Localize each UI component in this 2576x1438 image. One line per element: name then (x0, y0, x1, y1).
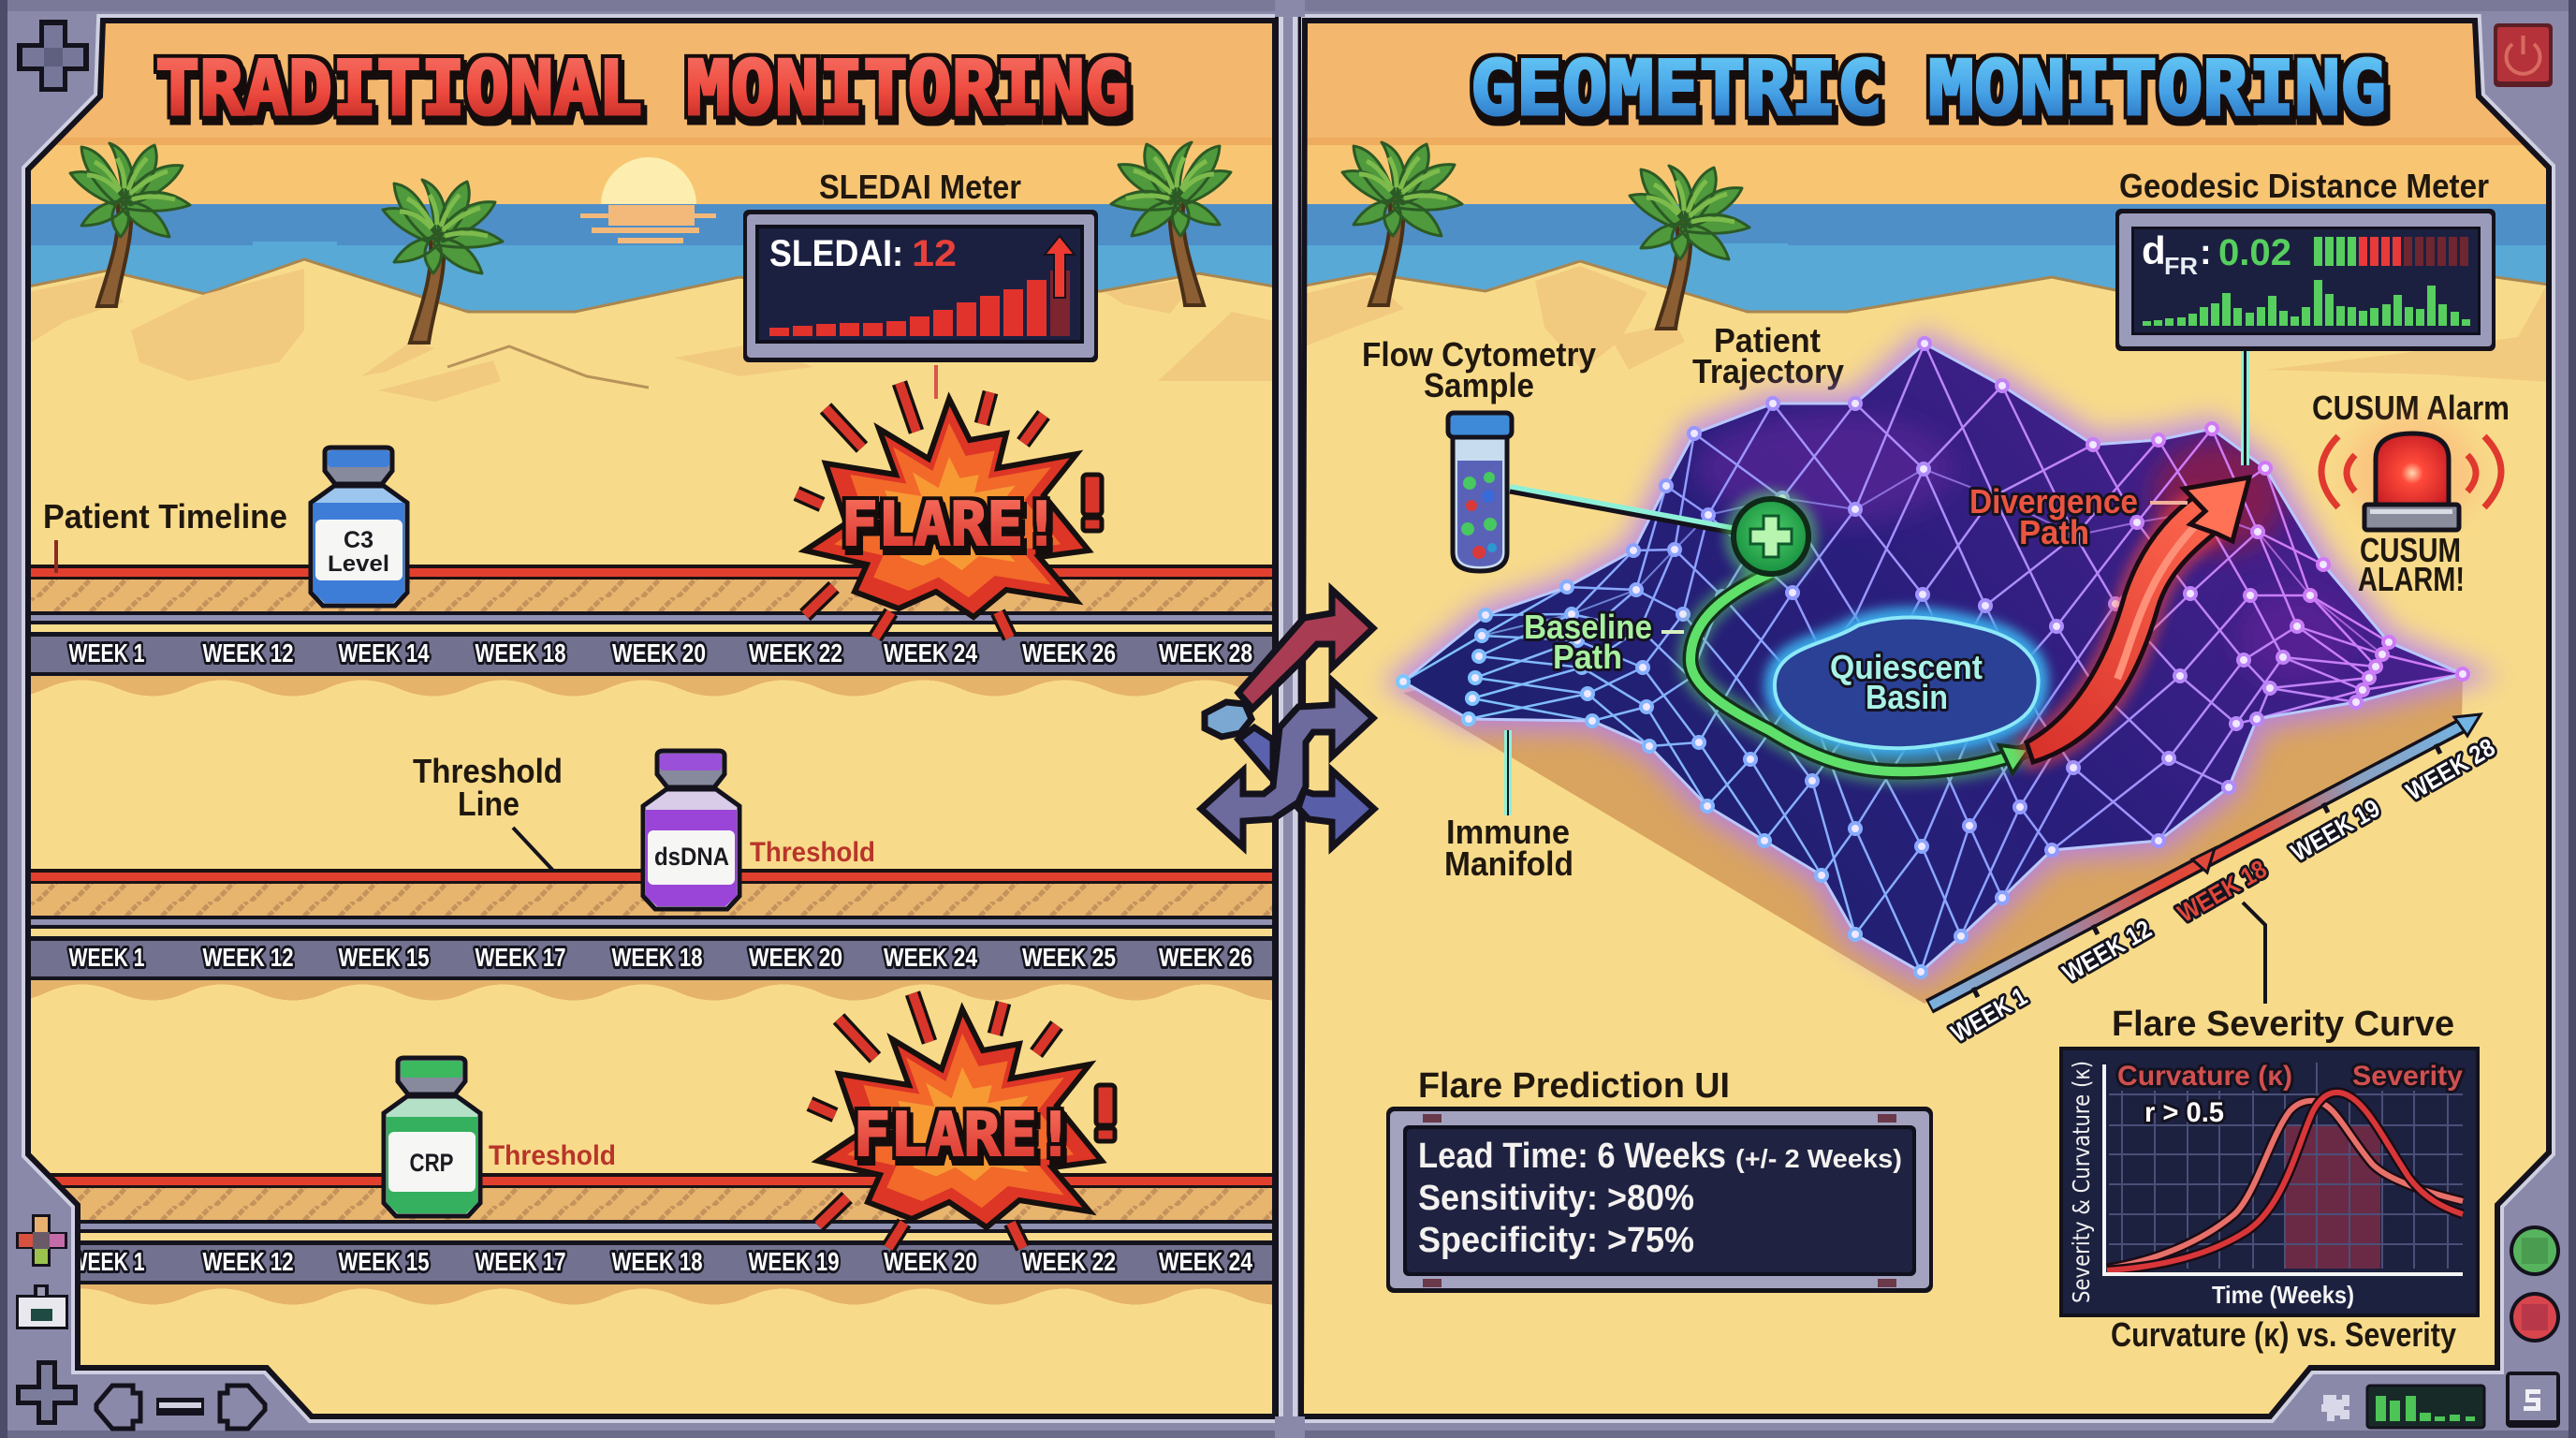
patient trajectory label: Trajectory (1692, 352, 1844, 390)
arrow cluster: crossing arrows (1201, 590, 1374, 847)
D-pad colored bottom left (16, 1214, 67, 1267)
histogram (2143, 280, 2470, 326)
label: immune manifold: Manifold (1444, 844, 1573, 883)
geodesic distance meter (2115, 209, 2496, 351)
C3 label (328, 527, 389, 577)
timeline 2 week labels: WEEK 15 (339, 943, 429, 972)
timeline 2 week labels: WEEK 12 (202, 943, 294, 972)
timeline 2 week labels: WEEK 24 (884, 943, 977, 972)
axis week labels (1946, 733, 2500, 1048)
D-pad top left (17, 20, 89, 92)
timeline 3 week labels: WEEK 19 (749, 1247, 839, 1276)
arrow: node (1205, 702, 1251, 737)
panel: traditional monitoring (0, 0, 1310, 1438)
threshold tag 3: Threshold (489, 1140, 616, 1171)
lead time: (+/- 2 Weeks) (1735, 1144, 1902, 1173)
chart legend: Curvature (κ) (2117, 1061, 2292, 1092)
axis week labels: WEEK 28 (2401, 733, 2500, 806)
timeline 1 week labels: WEEK 14 (339, 638, 430, 668)
lead time (1418, 1137, 1902, 1176)
timeline 1 week labels: WEEK 28 (1159, 638, 1252, 668)
title: geometric monitoring: GEOMETRIC MONITORING (1471, 45, 2386, 132)
power button (2494, 23, 2553, 87)
dFR value: : (2200, 233, 2212, 272)
label: baseline path: Baseline (1524, 608, 1652, 646)
label: divergence path (1969, 482, 2188, 551)
label: immune manifold (1444, 813, 1573, 883)
label: immune manifold: Immune (1446, 813, 1570, 851)
SLEDAI meter heading: SLEDAI Meter (819, 168, 1021, 206)
timeline 1 week labels: WEEK 18 (476, 638, 565, 668)
label: CUSUM alarm callout: ALARM! (2358, 560, 2465, 598)
axis week labels: WEEK 12 (2057, 915, 2157, 988)
patient trajectory label: Patient (1714, 321, 1821, 360)
axis week labels: WEEK 18 (2173, 855, 2272, 928)
SLEDAI value number: 12 (912, 233, 957, 274)
axis week labels: WEEK 1 (1946, 982, 2032, 1048)
timeline 2 week labels: WEEK 20 (749, 943, 842, 972)
time axis arrow (1929, 714, 2500, 1048)
timeline 1 week labels: WEEK 22 (749, 638, 842, 668)
patient trajectory label (1692, 321, 1844, 390)
icon: CUSUM beacon (2321, 417, 2501, 530)
threshold tag 2: Threshold (750, 837, 875, 868)
C3 label: C3 (344, 527, 373, 553)
divergence path red arrow (2027, 477, 2249, 762)
flow sample tube (1448, 413, 1732, 571)
menu box button (2506, 1372, 2560, 1428)
segment gauge (2314, 237, 2468, 266)
leader: week 18 to curve (2243, 902, 2265, 1004)
label: patient timeline: Patient Timeline (43, 497, 287, 536)
flare prediction panel (1386, 1107, 1933, 1293)
label: baseline path (1524, 608, 1684, 676)
panel: geometric monitoring background (1292, 0, 2576, 1438)
label: CUSUM alarm callout (2358, 531, 2465, 598)
manifold nodes glow (1403, 344, 2463, 972)
quiescent basin label: Basin (1866, 678, 1948, 716)
patient node green circle (1724, 490, 1818, 583)
CRP vial (384, 1058, 480, 1216)
flare prediction heading: Flare Prediction UI (1418, 1066, 1730, 1106)
timeline 3 week labels: WEEK 12 (202, 1247, 294, 1276)
dFR value: FR (2164, 252, 2198, 280)
flow cytometry label: Flow Cytometry (1362, 335, 1596, 374)
curve: curvature (2107, 1101, 2463, 1269)
timeline 2 week labels: WEEK 25 (1022, 943, 1116, 972)
timeline 2 week labels: WEEK 17 (476, 943, 565, 972)
timeline 2 week labels (66, 946, 1254, 970)
flare burst 1 (797, 383, 1102, 638)
dash button (156, 1398, 204, 1416)
label: divergence path: Divergence (1969, 482, 2138, 521)
D-pad bottom left (16, 1360, 78, 1425)
timeline 2 week labels: WEEK 18 (612, 943, 702, 972)
flow cytometry label: Sample (1424, 366, 1534, 404)
timeline 3 week labels: WEEK 17 (476, 1247, 565, 1276)
dsDNA vial (643, 751, 739, 909)
clipboard icon (16, 1284, 68, 1329)
CRP label: CRP (410, 1149, 453, 1177)
arrow: short blue segment (1238, 727, 1273, 780)
leader: meter to flare (934, 365, 938, 399)
timeline 1 week labels: WEEK 1 (69, 638, 144, 668)
lead time: Lead Time: 6 Weeks (1418, 1137, 1726, 1176)
SLEDAI meter panel (743, 210, 1098, 362)
specificity: Specificity: >75% (1418, 1221, 1694, 1260)
SLEDAI bar chart (769, 271, 1070, 336)
manifold outline (1403, 344, 2463, 972)
left hex button (96, 1386, 140, 1429)
mini signal screen (2367, 1386, 2484, 1428)
C3 label: Level (328, 551, 389, 577)
manifold node cores (1403, 344, 2463, 972)
title: traditional monitoring: TRADITIONAL MONITORING (155, 45, 1129, 132)
chart legend: Severity (2352, 1061, 2463, 1092)
chart legend (2117, 1061, 2463, 1092)
flare burst 1: FLARE! (842, 491, 1060, 560)
quiescent basin label (1830, 648, 1983, 716)
timeline 3 week labels: WEEK 24 (1159, 1247, 1252, 1276)
label: divergence path: Path (2019, 513, 2089, 551)
label: threshold line: Line (458, 785, 520, 823)
label: threshold line: Threshold (413, 752, 563, 790)
arrow: red up-right (1238, 590, 1373, 709)
SLEDAI value text: SLEDAI: (769, 233, 903, 274)
label: CUSUM alarm: CUSUM Alarm (2312, 389, 2510, 427)
arrow: S curve (1201, 681, 1373, 847)
leader: immune manifold (1504, 730, 1512, 815)
chart axes (2104, 1064, 2463, 1274)
label: threshold line (413, 752, 563, 872)
quiescent basin label: Quiescent (1830, 648, 1983, 686)
flare burst 2: FLARE! (854, 1101, 1074, 1170)
shadow under manifold (1403, 655, 2463, 1004)
dsDNA label: dsDNA (654, 843, 729, 871)
dFR value: 0.02 (2218, 232, 2291, 273)
axis week labels: WEEK 19 (2286, 794, 2385, 867)
immune manifold surface (1403, 344, 2463, 972)
label: baseline path: Path (1553, 638, 1622, 676)
baseline path green (1690, 573, 2029, 773)
C3 vial (311, 448, 407, 606)
rising arrow (1045, 236, 1075, 298)
chart: curvature vs severity (2059, 1047, 2480, 1317)
green status button (2510, 1225, 2560, 1276)
geodesic meter heading: Geodesic Distance Meter (2119, 167, 2489, 205)
correlation note: r > 0.5 (2144, 1097, 2224, 1128)
leader: tube to node (1510, 489, 1732, 533)
y axis label: Severity & Curvature (κ) (2068, 1061, 2095, 1303)
timeline 1 week labels (66, 640, 1254, 665)
flare burst 2 (810, 993, 1115, 1248)
center divider (1275, 0, 1305, 1438)
red status button (2510, 1292, 2560, 1343)
timeline 3 week labels: WEEK 22 (1022, 1247, 1116, 1276)
timeline 3 week labels (80, 1249, 1254, 1273)
flow cytometry label (1362, 335, 1596, 404)
dFR value: d (2142, 228, 2166, 272)
dFR value (2142, 228, 2291, 280)
quiescent basin (1775, 617, 2039, 748)
arrow: blue down-right (1298, 770, 1374, 847)
label: CUSUM alarm callout: CUSUM (2360, 531, 2461, 569)
timeline 2 week labels: WEEK 26 (1159, 943, 1252, 972)
label: patient timeline (43, 497, 287, 573)
right hex button (220, 1386, 265, 1429)
timeline 1 week labels: WEEK 26 (1022, 638, 1116, 668)
x axis label: Time (Weeks) (2212, 1281, 2354, 1309)
timeline 1 week labels: WEEK 24 (884, 638, 977, 668)
timeline 3 week labels: WEEK 15 (339, 1247, 429, 1276)
timeline 1 week labels: WEEK 12 (202, 638, 294, 668)
timeline 3 week labels: WEEK 20 (884, 1247, 977, 1276)
gear icon (2321, 1395, 2349, 1421)
timeline 1 week labels: WEEK 20 (612, 638, 706, 668)
curve: severity (2107, 1093, 2463, 1270)
timeline 3 week labels: WEEK 18 (612, 1247, 702, 1276)
sensitivity: Sensitivity: >80% (1418, 1179, 1694, 1218)
chart caption: Curvature (κ) vs. Severity (2111, 1315, 2456, 1354)
flare severity heading: Flare Severity Curve (2112, 1005, 2454, 1044)
leader: meter to manifold (2241, 351, 2249, 465)
timeline 2 week labels: WEEK 1 (69, 943, 144, 972)
timeline 3 week labels: WEEK 1 (69, 1247, 144, 1276)
manifold mesh (1403, 344, 2463, 972)
